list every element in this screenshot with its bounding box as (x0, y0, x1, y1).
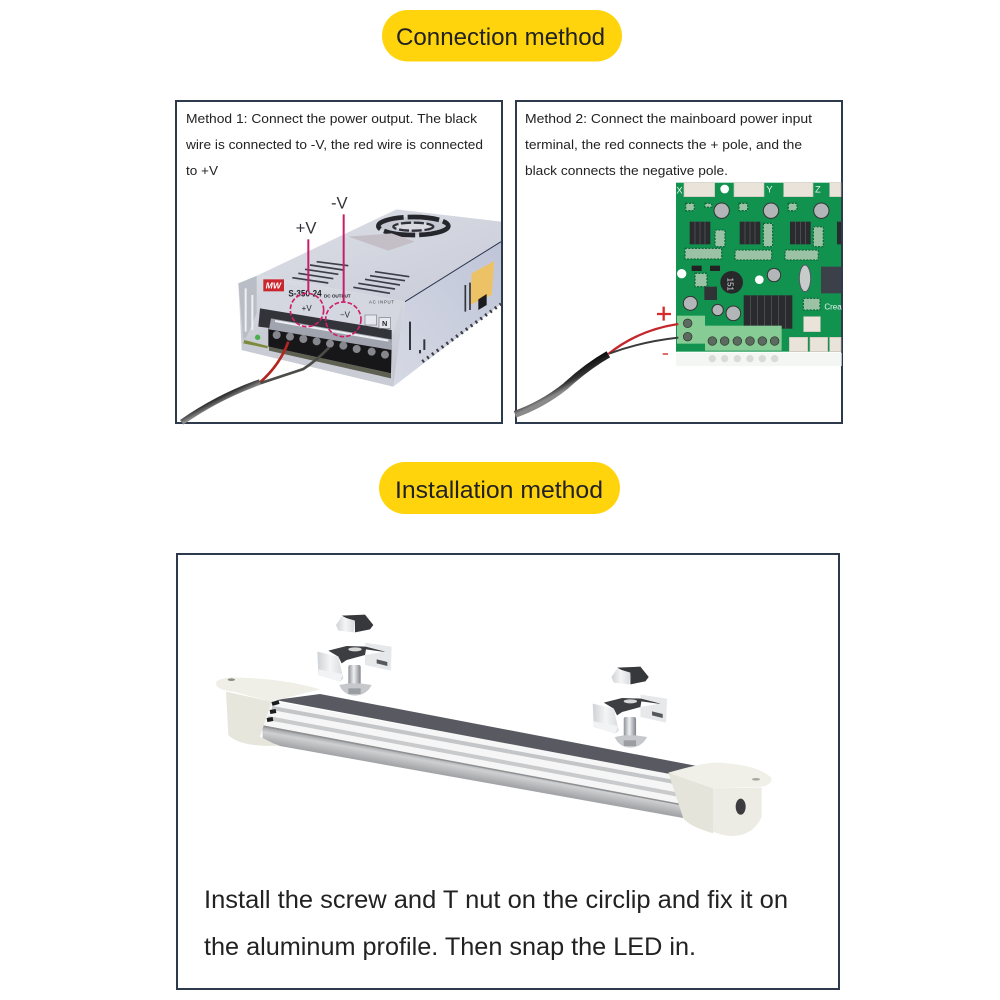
text: method 2 instructions: Method 2: Connect the mainboard power input (525, 111, 812, 126)
image: power supply unit: +V (302, 304, 312, 313)
image: right clip, screw and T nut (593, 667, 667, 748)
text: method 2 instructions: black connects the negative pole. (525, 163, 728, 178)
text: installation instructions: the aluminum profile. Then snap the LED in. (204, 933, 696, 961)
image: power supply unit: +V (296, 218, 317, 237)
image: power supply unit (182, 194, 501, 422)
panel: method 2 mainboard (515, 101, 842, 423)
image: LED aluminum bar (262, 694, 697, 818)
text: method 1 instructions: to +V (186, 163, 218, 178)
image: power supply unit: S-350-24 (288, 289, 322, 299)
image: power supply unit: MW (266, 281, 282, 291)
image: power supply unit: DC OUTPUT (324, 293, 351, 298)
heading: installation method (379, 462, 620, 514)
image: power supply unit: AC INPUT (369, 299, 394, 304)
panel: method 1 power supply (176, 101, 502, 423)
heading: connection method: Connection method (396, 24, 605, 51)
image: right end cap (668, 762, 772, 836)
heading: installation method: Installation method (395, 477, 603, 504)
text: method 1 instructions: wire is connected to -V, the red wire is connected (185, 137, 483, 152)
image: power supply unit: N (382, 319, 387, 328)
image: mainboard with wires: X (676, 185, 683, 195)
heading: connection method (382, 10, 622, 62)
text: installation instructions (204, 886, 788, 961)
text: method 2 instructions: terminal, the red connects the + pole, and the (525, 137, 802, 152)
image: power supply unit: -V (331, 194, 349, 213)
text: method 1 instructions: Method 1: Connect the power output. The black (186, 111, 478, 126)
image: mainboard with wires: 151 (725, 278, 734, 292)
image: mainboard with wires: Z (815, 185, 821, 195)
image: left end cap (216, 677, 320, 746)
image: mainboard with wires: Crea (824, 302, 842, 311)
image: left clip, screw and T nut (317, 615, 392, 696)
image: mainboard with wires (515, 183, 842, 414)
text: method 2 instructions (525, 111, 812, 178)
image: power supply unit: −V (340, 311, 351, 320)
image: mainboard with wires: Y (766, 185, 773, 195)
text: installation instructions: Install the screw and T nut on the circlip and fix it on (204, 886, 788, 914)
text: method 1 instructions (185, 111, 483, 178)
panel: installation (177, 554, 839, 989)
